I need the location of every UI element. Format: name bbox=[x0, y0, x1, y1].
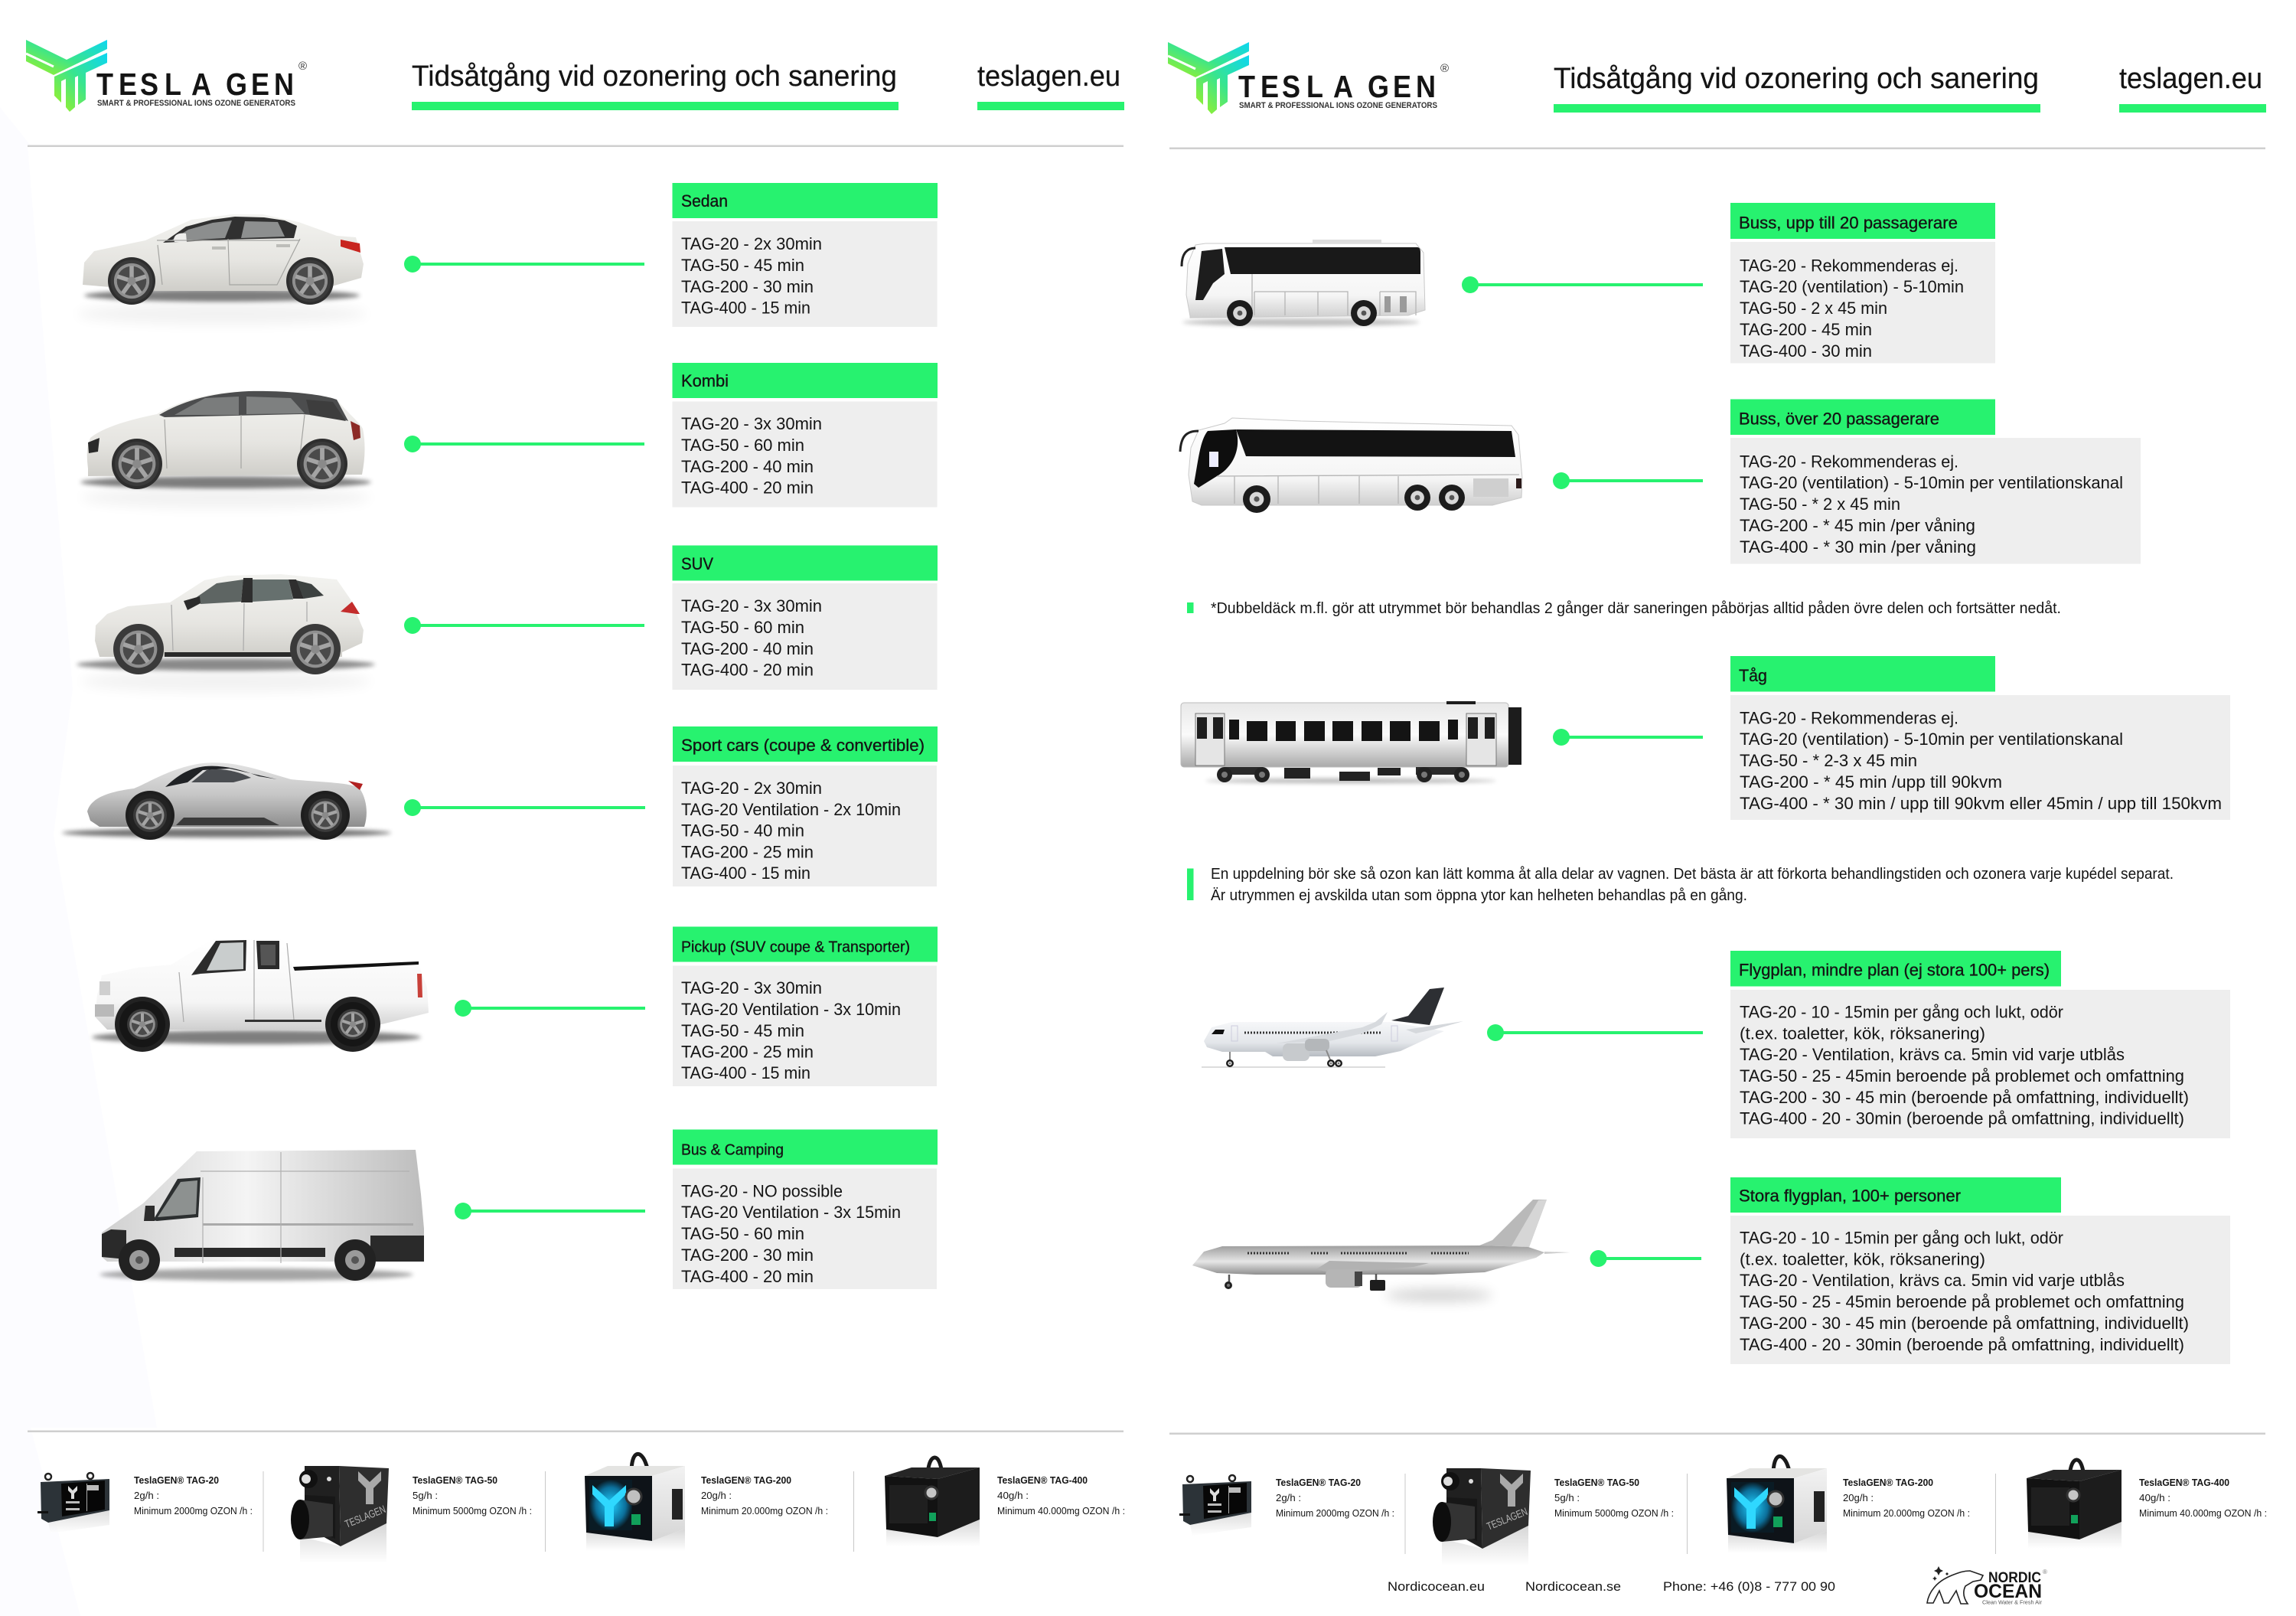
product: TAG-20 image bbox=[38, 1473, 109, 1533]
product: TAG-20 text: Minimum 2000mg OZON /h : bbox=[134, 1506, 253, 1516]
card: Sedan: TAG-200 - 30 min bbox=[681, 277, 814, 296]
website right bbox=[2119, 63, 2266, 113]
card: Tåg: TAG-200 - * 45 min /upp till 90kvm bbox=[1740, 772, 2002, 792]
card: Bus & Camping: TAG-20 - NO possible bbox=[681, 1182, 843, 1200]
logo: Teslagen: TESLAGEN bbox=[96, 67, 294, 103]
card: Sedan: TAG-400 - 15 min bbox=[681, 299, 810, 317]
note: train compartments: Är utrymmen ej avskilda utan som öppna ytor kan helheten behandlas på en gång. bbox=[1211, 887, 1747, 904]
contact line bbox=[1388, 1579, 1835, 1594]
product: TAG-50 image right: TESLAGEN bbox=[1485, 1505, 1529, 1533]
header: right bbox=[1168, 42, 2266, 114]
connector: train bbox=[1553, 729, 1703, 746]
product: TAG-400 image right bbox=[2027, 1460, 2122, 1549]
card: Buss över 20: Buss, över 20 passagerare bbox=[1739, 409, 1939, 429]
product: TAG-200 text right: 20g/h : bbox=[1843, 1493, 1874, 1503]
card: Sport cars: TAG-400 - 15 min bbox=[681, 863, 810, 883]
connector: SUV bbox=[404, 617, 644, 634]
card: Buss upp till 20 bbox=[1730, 203, 1995, 363]
page: left bbox=[26, 40, 1125, 1563]
product: TAG-50 text right: TeslaGEN® TAG-50 bbox=[1554, 1477, 1639, 1488]
product: TAG-200 image right bbox=[1727, 1456, 1827, 1553]
card: Sport cars bbox=[673, 726, 938, 886]
product: TAG-400 text right: TeslaGEN® TAG-400 bbox=[2139, 1477, 2229, 1488]
product: TAG-50 text: 5g/h : bbox=[413, 1490, 438, 1501]
connector: kombi bbox=[404, 436, 644, 452]
product: TAG-400 text: Minimum 40.000mg OZON /h : bbox=[997, 1506, 1125, 1516]
connector: pickup bbox=[455, 1000, 645, 1017]
website: teslagen.eu bbox=[977, 60, 1120, 93]
card: Stora flygplan: Stora flygplan, 100+ personer bbox=[1739, 1187, 1961, 1205]
product: TAG-400 image bbox=[885, 1458, 980, 1546]
vehicle: pickup bbox=[92, 937, 429, 1052]
vehicle: large plane bbox=[1192, 1200, 1570, 1301]
header: left bbox=[26, 40, 1124, 112]
connector: sedan bbox=[404, 256, 644, 273]
product: TAG-200 text: 20g/h : bbox=[701, 1490, 732, 1501]
product: TAG-200 text: TeslaGEN® TAG-200 bbox=[701, 1475, 791, 1486]
card: Pickup: TAG-20 Ventilation - 3x 10min bbox=[681, 1000, 901, 1019]
card: Kombi: TAG-200 - 40 min bbox=[681, 457, 814, 476]
product: TAG-50 image right bbox=[1433, 1468, 1531, 1565]
card: Kombi: TAG-50 - 60 min bbox=[681, 436, 804, 455]
product: TAG-50 image: TESLAGEN bbox=[343, 1503, 387, 1530]
footer products: right bbox=[1179, 1456, 2267, 1565]
card: Flygplan mindre plan: (t.ex. toaletter, kök, röksanering) bbox=[1740, 1024, 1985, 1043]
product: TAG-50 text right: 5g/h : bbox=[1554, 1493, 1580, 1503]
note: train compartments bbox=[1187, 866, 2174, 904]
product: TAG-200 text right bbox=[1843, 1477, 1970, 1519]
card: Bus & Camping: TAG-400 - 20 min bbox=[681, 1267, 814, 1286]
product: TAG-400 text: 40g/h : bbox=[997, 1490, 1029, 1501]
connector: large plane bbox=[1590, 1250, 1701, 1267]
product: TAG-200 text right: TeslaGEN® TAG-200 bbox=[1843, 1477, 1933, 1488]
product: TAG-20 text: TeslaGEN® TAG-20 bbox=[134, 1475, 219, 1486]
card: Sport cars: TAG-50 - 40 min bbox=[681, 821, 804, 841]
card: Pickup bbox=[673, 926, 938, 1086]
card: Bus & Camping bbox=[673, 1130, 938, 1289]
card: Stora flygplan bbox=[1730, 1177, 2230, 1364]
logo: Nordic Ocean: OCEAN bbox=[1974, 1581, 2042, 1602]
card: Pickup: TAG-50 - 45 min bbox=[681, 1021, 804, 1040]
card: Buss över 20: TAG-200 - * 45 min /per våning bbox=[1740, 516, 1975, 535]
vehicle: van bbox=[99, 1150, 424, 1281]
card: Tåg: Tåg bbox=[1739, 666, 1767, 685]
logo: Teslagen right bbox=[1168, 42, 1449, 114]
card: Sport cars: TAG-200 - 25 min bbox=[681, 842, 814, 862]
product: TAG-20 text: 2g/h : bbox=[134, 1490, 159, 1501]
card: Tåg: TAG-20 (ventilation) - 5-10min per ventilationskanal bbox=[1740, 730, 2123, 749]
card: SUV: TAG-400 - 20 min bbox=[681, 660, 814, 680]
product: TAG-20 image right bbox=[1179, 1475, 1251, 1536]
product: TAG-50 text bbox=[413, 1475, 532, 1516]
note: train compartments: En uppdelning bör ske så ozon kan lätt komma åt alla delar av vagnen. Det bästa är att förkorta behandlingstiden och ozonera varje kupédel separat. bbox=[1211, 866, 2174, 883]
product: TAG-50 text right bbox=[1554, 1477, 1674, 1519]
product: TAG-20 text right bbox=[1276, 1477, 1394, 1519]
card: Flygplan mindre plan: TAG-20 - 10 - 15min per gång och lukt, odör bbox=[1740, 1003, 2063, 1021]
card: Flygplan mindre plan: TAG-50 - 25 - 45min beroende på problemet och omfattning bbox=[1740, 1066, 2184, 1085]
card: SUV: SUV bbox=[681, 554, 713, 573]
card: Pickup: TAG-200 - 25 min bbox=[681, 1043, 814, 1061]
card: Stora flygplan: TAG-50 - 25 - 45min beroende på problemet och omfattning bbox=[1740, 1292, 2184, 1311]
card: Kombi: TAG-400 - 20 min bbox=[681, 478, 814, 498]
card: Buss över 20: TAG-400 - * 30 min /per våning bbox=[1740, 537, 1976, 557]
product: TAG-400 text right: Minimum 40.000mg OZON /h : bbox=[2139, 1508, 2267, 1519]
card: Stora flygplan: TAG-20 - Ventilation, krävs ca. 5min vid varje utblås bbox=[1740, 1271, 2125, 1290]
card: SUV: TAG-50 - 60 min bbox=[681, 618, 804, 637]
card: Sedan: TAG-50 - 45 min bbox=[681, 256, 804, 275]
product: TAG-50 text: Minimum 5000mg OZON /h : bbox=[413, 1506, 532, 1516]
vehicle: sedan bbox=[77, 214, 367, 325]
contact line: Phone: +46 (0)8 - 777 00 90 bbox=[1663, 1579, 1835, 1594]
product: TAG-20 text right: 2g/h : bbox=[1276, 1493, 1301, 1503]
card: Sedan: TAG-20 - 2x 30min bbox=[681, 234, 822, 253]
card: Buss upp till 20: TAG-400 - 30 min bbox=[1740, 341, 1872, 361]
logo: Teslagen: ® bbox=[298, 60, 307, 73]
card: Tåg: TAG-20 - Rekommenderas ej. bbox=[1740, 709, 1958, 727]
title bbox=[412, 60, 899, 110]
website bbox=[977, 60, 1124, 110]
product: TAG-200 text: Minimum 20.000mg OZON /h : bbox=[701, 1506, 828, 1516]
card: Sport cars: TAG-20 - 2x 30min bbox=[681, 779, 822, 798]
vehicle: sport car bbox=[62, 762, 391, 840]
product: TAG-200 text right: Minimum 20.000mg OZON /h : bbox=[1843, 1508, 1970, 1519]
logo: Teslagen right: ® bbox=[1440, 62, 1449, 75]
card: Bus & Camping: TAG-20 Ventilation - 3x 15min bbox=[681, 1203, 901, 1222]
card: Buss upp till 20: TAG-20 - Rekommenderas ej. bbox=[1740, 256, 1958, 276]
card: Stora flygplan: TAG-20 - 10 - 15min per gång och lukt, odör bbox=[1740, 1228, 2063, 1248]
card: Buss upp till 20: TAG-20 (ventilation) - 5-10min bbox=[1740, 277, 1964, 296]
vehicle: small bus bbox=[1182, 240, 1425, 326]
product: TAG-50 text right: Minimum 5000mg OZON /h : bbox=[1554, 1508, 1674, 1519]
card: Buss upp till 20: TAG-50 - 2 x 45 min bbox=[1740, 299, 1887, 318]
card: Flygplan mindre plan: Flygplan, mindre plan (ej stora 100+ pers) bbox=[1739, 960, 2050, 980]
logo: Teslagen right: TESLAGEN bbox=[1238, 70, 1436, 105]
connector: sport car bbox=[404, 799, 645, 816]
logo: Nordic Ocean: NORDIC bbox=[1988, 1570, 2041, 1586]
connector: small bus bbox=[1462, 276, 1703, 293]
page: right bbox=[1168, 42, 2267, 1606]
product: TAG-50 text: TeslaGEN® TAG-50 bbox=[413, 1475, 497, 1486]
logo: Nordic Ocean: ® bbox=[2043, 1569, 2047, 1575]
title right bbox=[1554, 63, 2040, 113]
logo: Teslagen right: SMART & PROFESSIONAL IONS OZONE GENERATORS bbox=[1239, 101, 1437, 110]
card: Flygplan mindre plan bbox=[1730, 951, 2230, 1138]
card: SUV: TAG-200 - 40 min bbox=[681, 639, 814, 658]
card: Pickup: TAG-400 - 15 min bbox=[681, 1063, 810, 1082]
vehicle: small plane bbox=[1202, 988, 1463, 1068]
card: Flygplan mindre plan: TAG-20 - Ventilation, krävs ca. 5min vid varje utblås bbox=[1740, 1045, 2125, 1064]
note: double-deckers: *Dubbeldäck m.fl. gör att utrymmet bör behandlas 2 gånger där saneringen påbörjas alltid påden övre delen och fortsätter nedåt. bbox=[1211, 600, 2061, 617]
product: TAG-20 text right: TeslaGEN® TAG-20 bbox=[1276, 1477, 1361, 1488]
title: Tidsåtgång vid ozonering och sanering bbox=[412, 60, 897, 93]
product: TAG-400 text: TeslaGEN® TAG-400 bbox=[997, 1475, 1088, 1486]
product: TAG-200 text bbox=[701, 1475, 828, 1516]
faint background shape bbox=[0, 107, 157, 1616]
card: Stora flygplan: TAG-200 - 30 - 45 min (beroende på omfattning, individuellt) bbox=[1740, 1314, 2189, 1333]
logo: Nordic Ocean bbox=[1927, 1566, 2047, 1606]
card: Buss över 20: TAG-20 - Rekommenderas ej. bbox=[1740, 452, 1958, 472]
vehicle: large bus bbox=[1180, 418, 1522, 513]
product: TAG-20 text bbox=[134, 1475, 253, 1516]
card: Bus & Camping: TAG-200 - 30 min bbox=[681, 1245, 814, 1265]
card: Sport cars: TAG-20 Ventilation - 2x 10min bbox=[681, 800, 901, 819]
logo: Nordic Ocean: Clean Water & Fresh Air bbox=[1982, 1600, 2043, 1606]
card: Buss över 20: TAG-50 - * 2 x 45 min bbox=[1740, 495, 1900, 514]
contact line: Nordicocean.se bbox=[1525, 1579, 1621, 1594]
connector: van bbox=[455, 1203, 645, 1219]
product: TAG-200 image bbox=[585, 1454, 685, 1551]
vehicle: train bbox=[1181, 701, 1521, 783]
card: Buss upp till 20: Buss, upp till 20 passagerare bbox=[1739, 213, 1958, 233]
contact line: Nordicocean.eu bbox=[1388, 1579, 1485, 1594]
card: Tåg bbox=[1730, 656, 2230, 820]
vehicle: SUV bbox=[77, 574, 375, 692]
card: Bus & Camping: Bus & Camping bbox=[681, 1142, 784, 1159]
footer products: left bbox=[38, 1454, 1125, 1563]
card: Flygplan mindre plan: TAG-400 - 20 - 30min (beroende på omfattning, individuellt) bbox=[1740, 1108, 2184, 1128]
card: Sport cars: Sport cars (coupe & convertible) bbox=[681, 736, 925, 755]
card: Stora flygplan: TAG-400 - 20 - 30min (beroende på omfattning, individuellt) bbox=[1740, 1335, 2184, 1354]
card: Tåg: TAG-400 - * 30 min / upp till 90kvm eller 45min / upp till 150kvm bbox=[1740, 794, 2222, 813]
card: Buss över 20 bbox=[1730, 400, 2141, 563]
logo: Teslagen bbox=[26, 40, 307, 112]
connector: small plane bbox=[1487, 1024, 1703, 1041]
product: TAG-50 image bbox=[291, 1466, 389, 1563]
card: Kombi: TAG-20 - 3x 30min bbox=[681, 414, 822, 433]
vehicle: kombi bbox=[80, 391, 371, 508]
card: Kombi bbox=[672, 363, 938, 507]
card: SUV: TAG-20 - 3x 30min bbox=[681, 596, 822, 615]
connector: large bus bbox=[1553, 472, 1703, 489]
card: Tåg: TAG-50 - * 2-3 x 45 min bbox=[1740, 751, 1917, 770]
card: Sedan bbox=[672, 183, 938, 327]
card: Pickup: TAG-20 - 3x 30min bbox=[681, 978, 822, 997]
title right: Tidsåtgång vid ozonering och sanering bbox=[1554, 63, 2039, 95]
card: Pickup: Pickup (SUV coupe & Transporter) bbox=[681, 939, 910, 955]
card: Bus & Camping: TAG-50 - 60 min bbox=[681, 1224, 804, 1243]
website right: teslagen.eu bbox=[2119, 63, 2262, 95]
card: SUV bbox=[672, 545, 938, 690]
logo: Teslagen: SMART & PROFESSIONAL IONS OZONE GENERATORS bbox=[97, 99, 295, 108]
card: Stora flygplan: (t.ex. toaletter, kök, röksanering) bbox=[1740, 1249, 1985, 1269]
card: Flygplan mindre plan: TAG-200 - 30 - 45 min (beroende på omfattning, individuellt) bbox=[1740, 1088, 2189, 1107]
product: TAG-400 text right: 40g/h : bbox=[2139, 1493, 2170, 1503]
card: Kombi: Kombi bbox=[681, 371, 729, 390]
product: TAG-400 text right bbox=[2139, 1477, 2267, 1519]
product: TAG-400 text bbox=[997, 1475, 1125, 1516]
card: Sedan: Sedan bbox=[681, 191, 728, 211]
card: Buss över 20: TAG-20 (ventilation) - 5-10min per ventilationskanal bbox=[1740, 473, 2123, 492]
product: TAG-20 text right: Minimum 2000mg OZON /h : bbox=[1276, 1508, 1394, 1519]
card: Buss upp till 20: TAG-200 - 45 min bbox=[1740, 320, 1872, 339]
